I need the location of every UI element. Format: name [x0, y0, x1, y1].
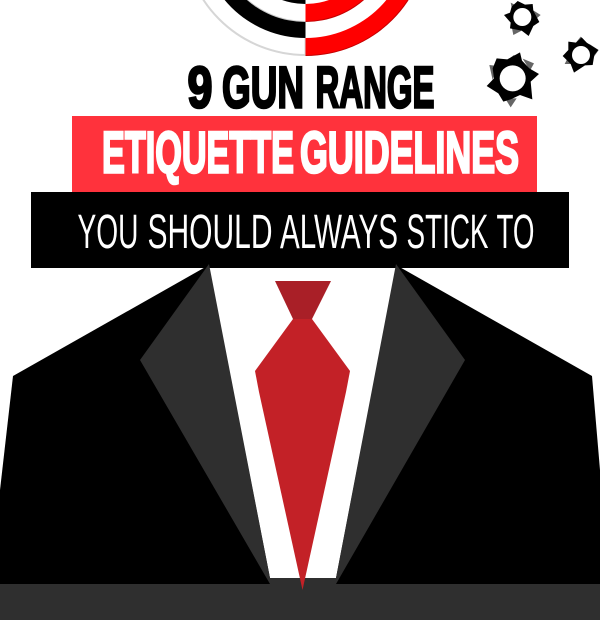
heading: 9 gun range: RANGE — [316, 56, 434, 120]
illustration: suit — [0, 264, 600, 620]
heading: you should always stick to — [78, 206, 534, 259]
heading: you should always stick to: SHOULD — [148, 206, 272, 259]
icon: bullet holes — [487, 1, 599, 107]
heading: you should always stick to: TO — [496, 206, 534, 259]
icon: bullet hole large — [487, 52, 539, 107]
heading: you should always stick to: ALWAYS — [280, 206, 398, 259]
left lapel — [140, 264, 275, 584]
tie knot — [275, 281, 331, 319]
banner: black — [31, 192, 569, 268]
icon: shooting target — [184, 0, 428, 56]
banner: red — [72, 116, 537, 192]
bottom bar — [0, 578, 600, 620]
heading: 9 gun range — [188, 56, 434, 120]
heading: 9 gun range: 9 — [188, 56, 212, 120]
right lapel — [331, 264, 465, 584]
shirt — [209, 268, 396, 578]
icon: bullet hole top — [504, 1, 541, 36]
suit jacket — [0, 265, 600, 590]
icon: bullet hole right — [563, 37, 599, 73]
heading: you should always stick to: YOU — [78, 206, 138, 259]
heading: you should always stick to: STICK — [406, 206, 488, 259]
heading: 9 gun range: GUN — [222, 56, 304, 120]
heading: etiquette guidelines: ETIQUETTE — [102, 120, 294, 186]
tie blade — [255, 319, 350, 590]
